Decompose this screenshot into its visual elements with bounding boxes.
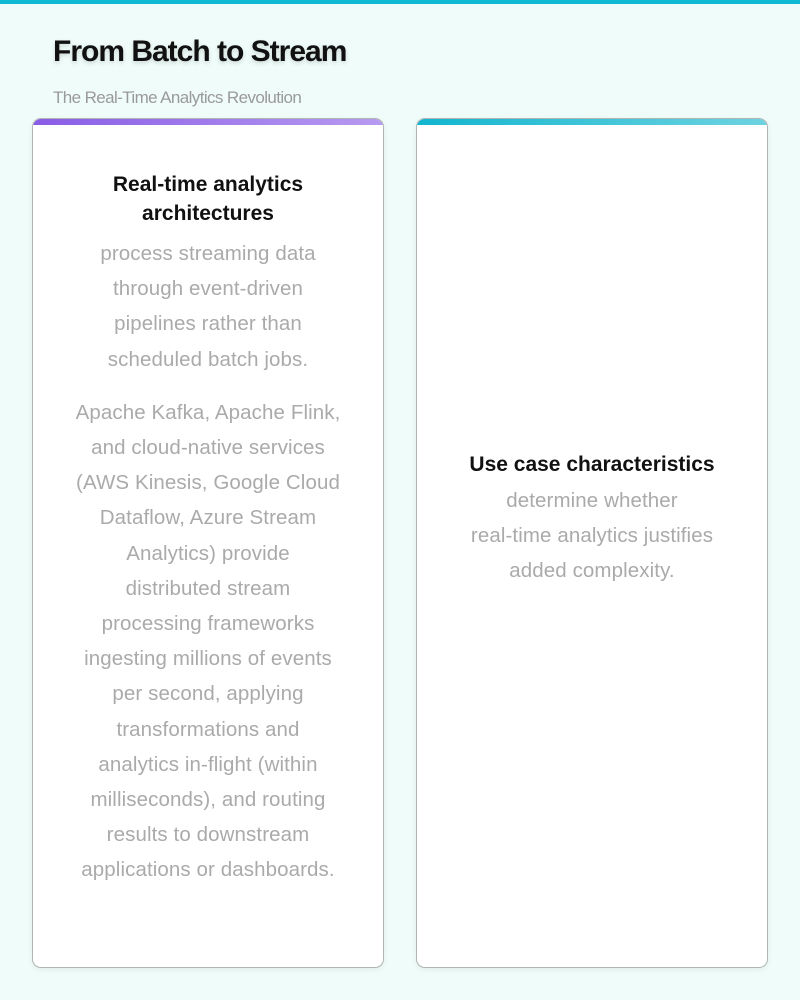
subtitle: The Real-Time Analytics Revolution	[53, 88, 301, 107]
text block: frameworks: Apache Kafka, Apache Flink,	[76, 401, 340, 424]
text block: use case	[471, 489, 713, 582]
title: From Batch to Stream	[53, 35, 346, 68]
heading: real-time analytics architectures	[113, 173, 303, 225]
text block: frameworks: milliseconds), and routing	[90, 788, 326, 811]
text block: frameworks: analytics in-flight (within	[98, 753, 318, 776]
text block: frameworks: and cloud-native services	[91, 436, 325, 459]
text block: frameworks: transformations and	[116, 718, 300, 741]
text block: intro: process streaming data	[100, 242, 316, 265]
panel: left card	[32, 118, 384, 968]
text block: intro	[100, 242, 316, 371]
text block: intro: through event-driven	[113, 277, 303, 300]
text block: use case: determine whether	[506, 489, 678, 512]
heading: real-time analytics architectures: Real-time analytics	[113, 173, 303, 196]
heading: use case characteristics: Use case characteristics	[469, 453, 715, 476]
text block: frameworks	[76, 401, 340, 881]
text block: frameworks: results to downstream	[107, 823, 309, 846]
text block: intro: pipelines rather than	[114, 312, 302, 335]
text block: frameworks: ingesting millions of events	[84, 647, 332, 670]
text block: frameworks: processing frameworks	[102, 612, 314, 635]
text block: frameworks: distributed stream	[126, 577, 290, 600]
text block: use case: real-time analytics justifies	[471, 524, 713, 547]
text block: frameworks: per second, applying	[112, 682, 304, 705]
text block: frameworks: applications or dashboards.	[81, 858, 335, 881]
panel: right card	[416, 118, 768, 968]
text block: frameworks: Analytics) provide	[126, 542, 290, 565]
heading: real-time analytics architectures: architectures	[142, 202, 274, 225]
text block: frameworks: (AWS Kinesis, Google Cloud	[76, 471, 340, 494]
text block: intro: scheduled batch jobs.	[108, 348, 308, 371]
text block: use case: added complexity.	[509, 559, 675, 582]
text block: frameworks: Dataflow, Azure Stream	[100, 506, 316, 529]
